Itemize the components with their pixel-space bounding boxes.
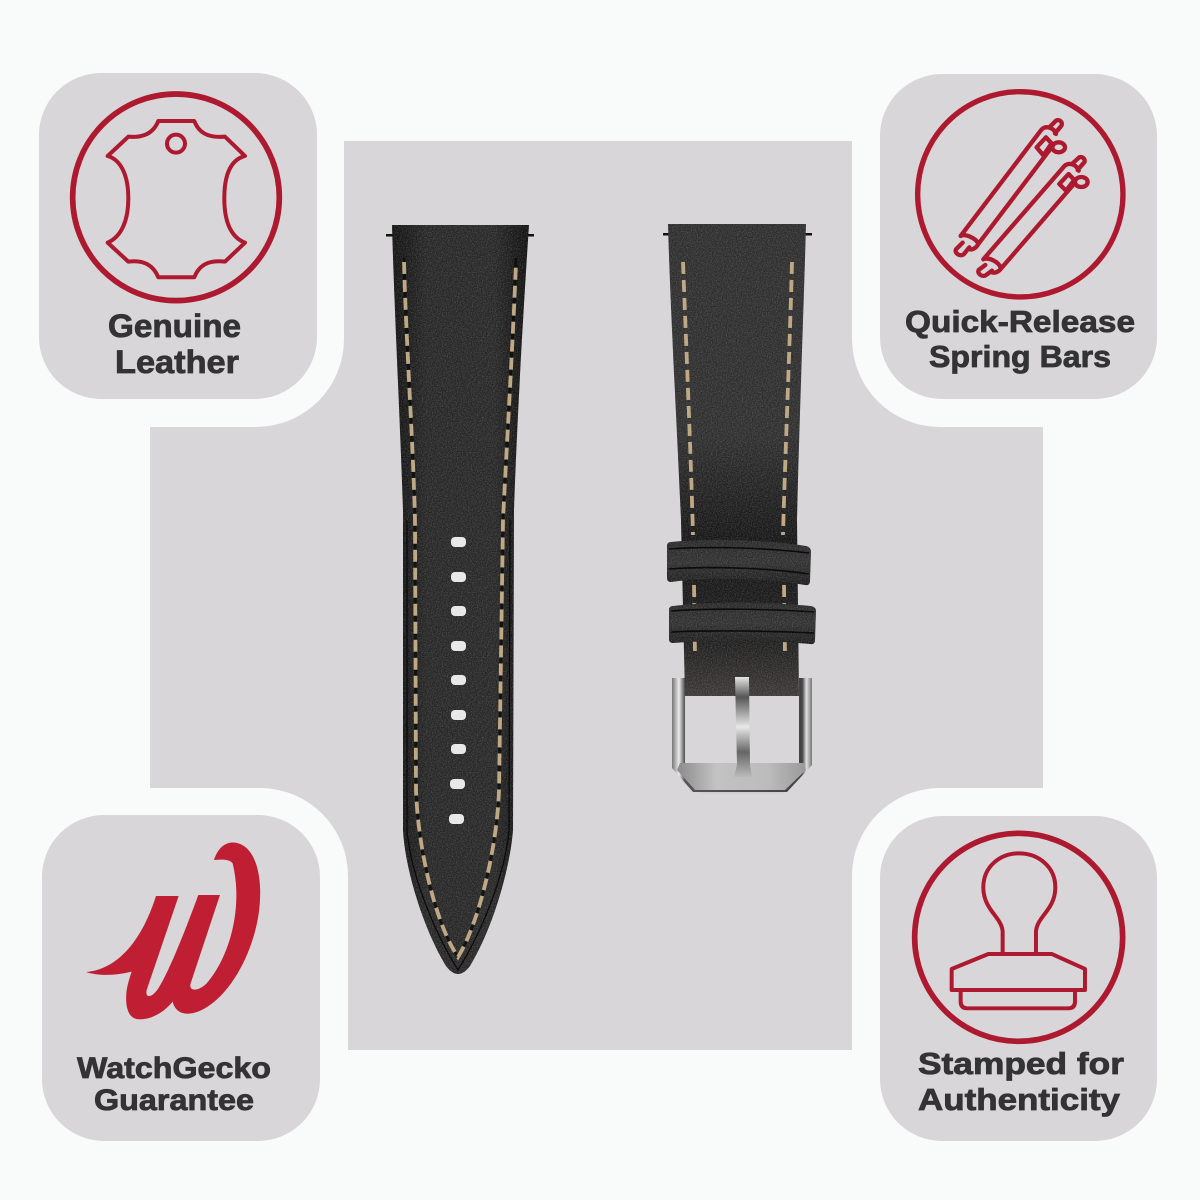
- buckle tongue: [734, 677, 752, 777]
- panel: watchgecko guarantee: [42, 815, 320, 1141]
- label: Stamped for Authenticity: [918, 1046, 1124, 1117]
- label: Stamped for Authenticity: Stamped for: [918, 1046, 1124, 1081]
- label: WatchGecko Guarantee: Guarantee: [94, 1084, 254, 1117]
- strap stitching: [683, 262, 792, 655]
- label: Genuine Leather: Leather: [115, 344, 239, 380]
- central grey cross backdrop: [150, 141, 1043, 1050]
- panel: quick-release spring bars: [880, 74, 1157, 399]
- buckle frame: [672, 678, 812, 794]
- panel: stamped for authenticity: [880, 816, 1157, 1141]
- stitching shadow: [404, 258, 516, 957]
- strap body: [668, 224, 806, 696]
- icon: spring bars in circle: [918, 92, 1123, 297]
- label: Quick-Release Spring Bars: [905, 304, 1135, 374]
- keeper loop lower: [669, 603, 816, 644]
- keeper loop upper: [667, 540, 811, 585]
- stitching: [404, 262, 516, 957]
- label: Genuine Leather: [108, 308, 241, 380]
- strap holes: [449, 537, 466, 824]
- panel: genuine leather: [39, 73, 317, 399]
- label: Genuine Leather: Genuine: [108, 308, 241, 344]
- icon: stamp in circle: [915, 833, 1123, 1041]
- label: Stamped for Authenticity: Authenticity: [918, 1082, 1121, 1117]
- strap edge line: [407, 520, 510, 970]
- label: WatchGecko Guarantee: [77, 1052, 271, 1117]
- icon: leather hide in circle: [73, 94, 279, 301]
- icon: WatchGecko W logo: [86, 843, 260, 1019]
- short strap piece with buckle: [663, 224, 816, 794]
- long strap piece with holes: [386, 225, 534, 974]
- label: WatchGecko Guarantee: WatchGecko: [77, 1052, 271, 1085]
- label: Quick-Release Spring Bars: Spring Bars: [929, 339, 1111, 374]
- label: Quick-Release Spring Bars: Quick-Release: [905, 304, 1135, 339]
